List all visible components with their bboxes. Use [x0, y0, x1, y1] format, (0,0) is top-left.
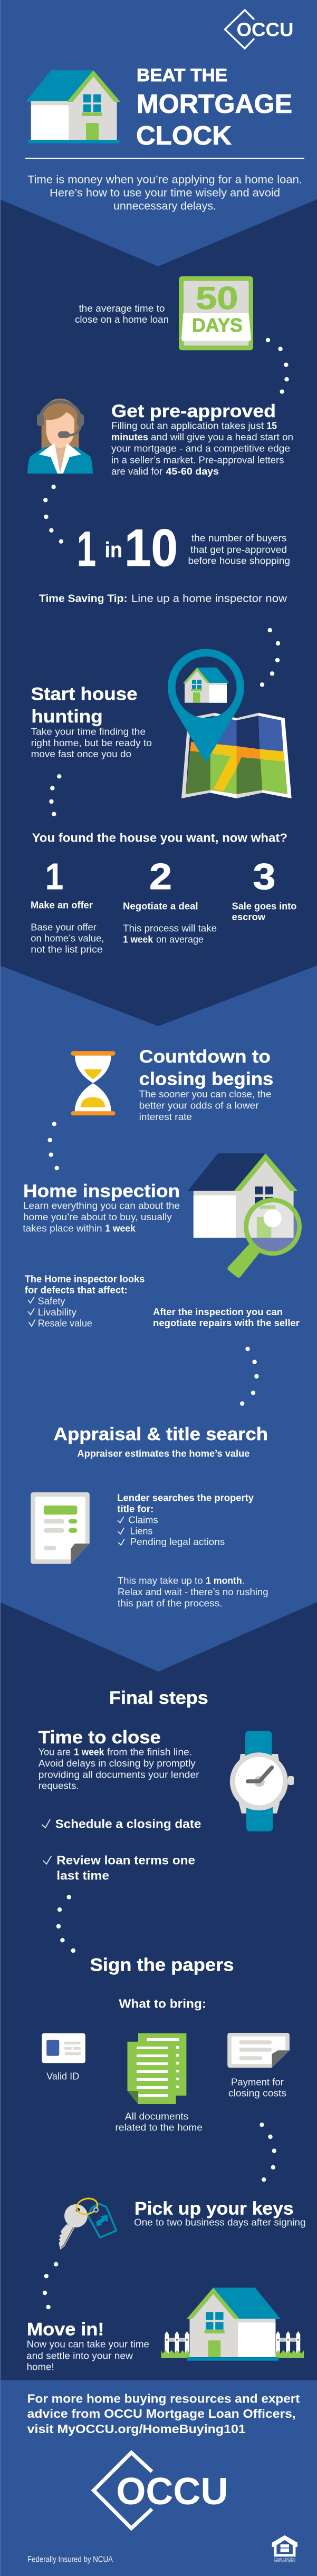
footnote: federally insured: Federally Insured by NCUA: [27, 2555, 113, 2564]
heading and text: get pre-approved: minutes: [111, 432, 148, 442]
heading: appraisal and title search: Appraiser estimates the home’s value: [77, 1448, 249, 1459]
heading and text: time to close: 1 week: [74, 1747, 104, 1757]
stat: 1 in 10: [77, 518, 178, 577]
heading: sign the papers: Sign the papers: [90, 1955, 234, 1975]
logo: OCCU footer: OCCU: [116, 2471, 228, 2513]
stat: 1 in 10: in: [104, 538, 122, 562]
list: lender title search: Claims: [128, 1514, 158, 1525]
logo: equal housing opportunity: [272, 2535, 297, 2563]
list: inspector looks for: Livability: [38, 1307, 76, 1317]
text: may take a month: 1 month: [206, 1575, 242, 1586]
heading and text: move in: Move in!: [27, 2320, 104, 2340]
step 1: make an offer: [31, 856, 104, 954]
item: payment for closing costs: closing costs: [228, 2088, 286, 2098]
call to action text: For more home buying resources and expert: [27, 2392, 300, 2406]
text: may take a month: [118, 1575, 268, 1609]
call to action text: [27, 2392, 300, 2436]
item: payment for closing costs: [227, 2033, 290, 2098]
step 3: sale goes into escrow: Sale goes into: [232, 901, 296, 911]
heading: now what: You found the house you want, now what?: [32, 831, 287, 845]
text: may take a month: .: [242, 1575, 245, 1586]
text: average time: close on a home loan: [75, 314, 169, 325]
dotted path 1: [266, 338, 289, 394]
step 1: make an offer: Base your offer: [31, 922, 97, 932]
icon: 50 days calendar: [179, 276, 253, 350]
heading and text: start house hunting: right home, but be ready to: [31, 738, 152, 748]
step 1: make an offer: not the list price: [31, 944, 103, 954]
heading and text: pick up your keys: [134, 2199, 306, 2228]
heading and text: start house hunting: hunting: [31, 707, 103, 727]
icon: woman with headset: [27, 399, 93, 474]
dotted path 6: [240, 1347, 259, 1406]
heading: appraisal and title search: Appraisal & title search: [54, 1424, 268, 1444]
step 2: negotiate a deal: This process will take: [123, 923, 217, 933]
list: lender title search: title for:: [117, 1504, 153, 1514]
icon: 50 days calendar: 50: [196, 281, 238, 316]
logo: equal housing opportunity: EQUAL HOUSING: [274, 2558, 295, 2561]
heading: sign the papers: [90, 1955, 234, 2010]
text: may take a month: This may take up to: [118, 1575, 203, 1586]
list: lender title search: Lender searches the property: [117, 1493, 254, 1503]
icon: house keys: [59, 2196, 116, 2250]
heading and text: move in: [26, 2320, 149, 2372]
item: all documents: [115, 2033, 203, 2133]
heading and text: get pre-approved: Get pre-approved: [111, 401, 276, 421]
heading: appraisal and title search: [54, 1424, 268, 1459]
step 1: make an offer: on home’s value,: [31, 933, 104, 943]
section background: footer: [0, 2380, 317, 2576]
icon: map with location pin: [168, 649, 292, 798]
title: MORTGAGE: [137, 89, 292, 119]
text: average time: [75, 303, 169, 325]
list: lender title search: Liens: [130, 1526, 152, 1536]
heading and text: home inspection: 1 week: [105, 1223, 136, 1233]
list: inspector looks for: The Home inspector looks: [25, 1274, 145, 1285]
intro text: Here’s how to use your time wisely and avoid: [50, 187, 280, 199]
list: lender title search: [117, 1493, 254, 1547]
title: BEAT THE: [137, 65, 227, 85]
heading and text: countdown to closing: Countdown to: [139, 1047, 271, 1067]
heading and text: home inspection: [23, 1181, 180, 1233]
dotted path 5: [47, 1122, 59, 1170]
icon: hourglass: [71, 1051, 115, 1115]
icon: house with picket fence: [161, 2288, 304, 2361]
heading and text: countdown to closing: The sooner you can close, the: [139, 1089, 271, 1099]
text: buyers pre-approved: the number of buyers: [191, 533, 287, 544]
intro text: [27, 174, 302, 213]
heading and text: start house hunting: move fast once you do: [31, 749, 131, 759]
heading and text: countdown to closing: interest rate: [139, 1112, 192, 1122]
intro text: unnecessary delays.: [113, 200, 216, 213]
step 3: sale goes into escrow: escrow: [232, 912, 266, 922]
title: CLOCK: [136, 121, 232, 150]
time saving tip: Time Saving Tip:: [39, 593, 128, 605]
list: inspector looks for: [25, 1274, 145, 1328]
heading and text: get pre-approved: 15: [267, 420, 277, 431]
heading and text: get pre-approved: 45-60 days: [166, 466, 219, 477]
heading and text: home inspection: takes place within: [23, 1223, 102, 1233]
text: may take a month: Relax and wait - there’s no rushing: [118, 1587, 268, 1597]
section background: intro chevron: [0, 0, 317, 266]
step 3: sale goes into escrow: 3: [253, 856, 275, 897]
dotted path 8: [260, 2122, 276, 2182]
heading and text: countdown to closing: better your odds of a lower: [139, 1100, 259, 1111]
heading and text: get pre-approved: in a seller’s market. Pre-approval letters: [111, 455, 284, 465]
item: all documents: related to the home: [115, 2122, 203, 2133]
heading: final steps: Final steps: [109, 1688, 208, 1708]
heading and text: time to close: providing all documents your lender: [39, 1770, 199, 1780]
heading and text: home inspection: Learn everything you can about the: [23, 1200, 180, 1211]
text: average time: the average time to: [79, 303, 165, 314]
step 1: make an offer: Make an offer: [31, 900, 93, 910]
heading and text: home inspection: home you’re about to buy, usually: [23, 1212, 172, 1222]
heading and text: time to close: Avoid delays in closing by promptly: [39, 1758, 196, 1769]
heading and text: time to close: Time to close: [39, 1728, 161, 1748]
step 2: negotiate a deal: [123, 856, 217, 944]
heading and text: time to close: [39, 1728, 199, 1791]
heading and text: start house hunting: Start house: [31, 684, 138, 704]
time saving tip: [39, 593, 287, 605]
dotted path 4: [49, 774, 62, 816]
heading and text: get pre-approved: your mortgage - and a competitive edge: [111, 443, 290, 454]
dotted path 9: [43, 2262, 58, 2309]
logo: OCCU footer: [94, 2453, 228, 2528]
list: inspector looks for: Resale value: [38, 1318, 92, 1328]
item: valid ID: [42, 2033, 85, 2081]
step 2: negotiate a deal: on average: [156, 934, 204, 944]
time saving tip: Line up a home inspector now: [131, 593, 287, 605]
heading and text: time to close: from the finish line.: [107, 1747, 192, 1757]
heading and text: get pre-approved: and will give you a head start on: [151, 432, 293, 442]
logo: equal housing opportunity: OPPORTUNITY: [274, 2560, 296, 2563]
heading and text: home inspection: Home inspection: [23, 1181, 180, 1201]
icon: house: [26, 70, 120, 143]
heading and text: move in: and settle into your new: [26, 2350, 133, 2361]
logo: OCCU top: OCCU: [236, 19, 293, 40]
icon: 50 days calendar: DAYS: [192, 314, 243, 336]
dotted path 7: [56, 1895, 75, 1953]
heading and text: pick up your keys: One to two business days after signing: [134, 2217, 306, 2228]
step 2: negotiate a deal: 1 week: [123, 934, 153, 944]
heading and text: time to close: requests.: [39, 1781, 79, 1791]
icon: house with magnifying glass: [188, 1153, 300, 1278]
step 2: negotiate a deal: Negotiate a deal: [123, 901, 198, 911]
step 2: negotiate a deal: 2: [149, 856, 172, 897]
text: after the inspection: negotiate repairs with the seller: [153, 1318, 300, 1328]
title: [136, 65, 292, 150]
step 3: sale goes into escrow: [232, 856, 296, 922]
heading: sign the papers: What to bring:: [119, 1996, 206, 2010]
logo: OCCU top: [225, 10, 293, 49]
icon: wristwatch: [230, 1731, 294, 1831]
heading and text: time to close: You are: [39, 1747, 71, 1757]
heading and text: start house hunting: [31, 684, 152, 759]
text: buyers pre-approved: [188, 533, 290, 566]
checklist: final tasks: Schedule a closing date: [55, 1817, 201, 1831]
call to action text: visit MyOCCU.org/HomeBuying101: [27, 2422, 246, 2436]
heading and text: pick up your keys: Pick up your keys: [135, 2199, 294, 2219]
heading and text: get pre-approved: Filling out an application takes just: [111, 420, 264, 431]
text: after the inspection: After the inspection you can: [153, 1307, 283, 1317]
section background: countdown chevron: [0, 966, 317, 1672]
list: inspector looks for: Safety: [38, 1296, 65, 1306]
dotted path 3: [260, 628, 280, 687]
text: buyers pre-approved: that get pre-approved: [190, 544, 287, 555]
heading and text: countdown to closing: [139, 1047, 273, 1122]
checklist: final tasks: last time: [56, 1868, 109, 1882]
heading and text: move in: Now you can take your time: [27, 2339, 149, 2350]
dotted path 2: [43, 485, 63, 544]
intro text: Time is money when you’re applying for a home loan.: [27, 174, 302, 186]
list: lender title search: Pending legal actions: [130, 1537, 225, 1547]
heading and text: get pre-approved: [111, 401, 293, 477]
heading and text: start house hunting: Take your time finding the: [31, 726, 146, 737]
checklist: final tasks: Review loan terms one: [56, 1854, 195, 1867]
checklist: final tasks: [42, 1817, 201, 1882]
step 1: make an offer: 1: [45, 856, 63, 897]
icon: title document: [31, 1492, 90, 1564]
heading and text: countdown to closing: closing begins: [139, 1069, 273, 1089]
item: all documents: All documents: [125, 2111, 188, 2121]
list: inspector looks for: for defects that affect:: [25, 1285, 127, 1296]
text: after the inspection: [153, 1307, 300, 1328]
heading and text: move in: home!: [27, 2362, 54, 2372]
text: may take a month: this part of the process.: [118, 1598, 223, 1609]
item: payment for closing costs: Payment for: [231, 2077, 284, 2087]
heading and text: get pre-approved: are valid for: [111, 466, 162, 477]
stat: 1 in 10: 1: [77, 521, 96, 576]
call to action text: advice from OCCU Mortgage Loan Officers,: [27, 2407, 296, 2420]
text: buyers pre-approved: before house shopping: [188, 555, 290, 566]
item: valid ID: Valid ID: [46, 2071, 79, 2081]
stat: 1 in 10: 10: [124, 518, 178, 577]
